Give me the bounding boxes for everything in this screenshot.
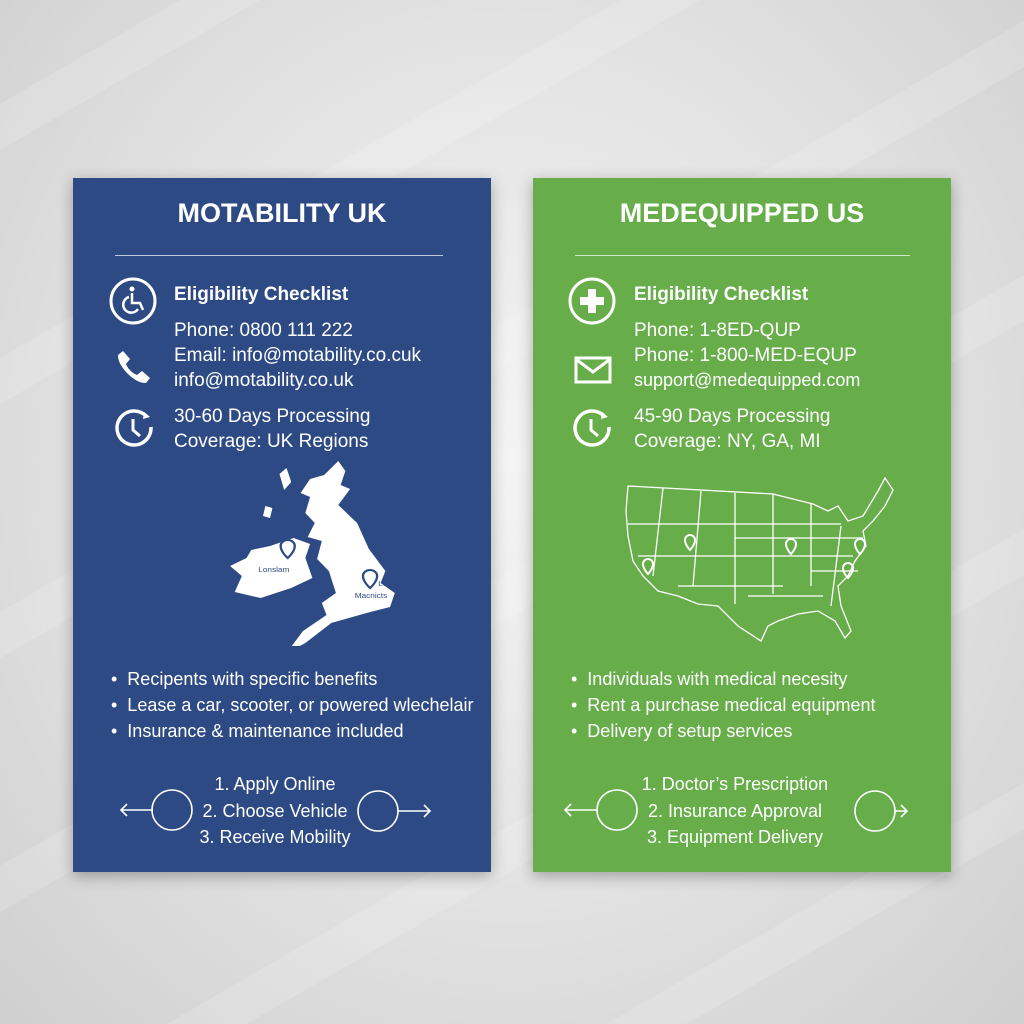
- title: MOTABILITY UK: [178, 198, 386, 228]
- arrows and circles: [120, 789, 431, 832]
- map: UK: Lossion: [378, 580, 407, 588]
- text: eligibility: Eligibility Checklist: [174, 284, 348, 305]
- bullets: [111, 669, 474, 741]
- text: contacts: Phone: 1-8ED-QUP: [634, 320, 801, 341]
- icon: phone: [118, 351, 150, 383]
- panel: MedEquipped US: [533, 178, 951, 872]
- icon: clock: [115, 409, 153, 447]
- icon: medical cross: [568, 278, 616, 324]
- text: processing: Coverage: UK Regions: [174, 431, 368, 452]
- text: contacts: info@motability.co.uk: [174, 370, 353, 391]
- panel: Motability UK: [73, 178, 491, 872]
- steps: 2. Insurance Approval: [648, 800, 822, 820]
- text: processing: Coverage: NY, GA, MI: [634, 431, 821, 452]
- bullets: • Insurance & maintenance included: [111, 721, 403, 741]
- text: contacts: support@medequipped.com: [634, 370, 860, 390]
- steps: 3. Equipment Delivery: [647, 827, 823, 847]
- text: processing: [174, 406, 370, 452]
- map: UK: Lonslam: [258, 566, 289, 574]
- steps: 1. Doctor’s Prescription: [642, 774, 828, 794]
- text: contacts: [634, 320, 860, 390]
- steps: 2. Choose Vehicle: [202, 800, 348, 820]
- icon: envelope: [574, 356, 612, 384]
- text: processing: 45-90 Days Processing: [634, 406, 830, 427]
- bullets: [571, 669, 876, 741]
- steps: [642, 774, 828, 847]
- text: contacts: Phone: 1-800-MED-EQUP: [634, 345, 857, 366]
- icon: wheelchair: [110, 278, 156, 324]
- title: MEDEQUIPPED US: [620, 198, 864, 228]
- steps: 3. Receive Mobility: [199, 827, 351, 847]
- icon: clock: [573, 409, 611, 447]
- bullets: • Individuals with medical necesity: [571, 669, 847, 689]
- bullets: • Delivery of setup services: [571, 721, 792, 741]
- bullets: • Recipents with specific benefits: [111, 669, 377, 689]
- map: UK: [230, 461, 407, 646]
- text: processing: [634, 406, 830, 452]
- bullets: • Lease a car, scooter, or powered wlechelair: [111, 695, 474, 715]
- text: eligibility: Eligibility Checklist: [634, 284, 808, 305]
- text: contacts: Email: info@motability.co.cuk: [174, 345, 421, 366]
- bullets: • Rent a purchase medical equipment: [571, 695, 875, 715]
- steps: [199, 774, 351, 847]
- map: USA: [625, 476, 894, 642]
- arrows and circles: [564, 789, 908, 832]
- map: UK: Macnicts: [355, 592, 387, 600]
- steps: 1. Apply Online: [214, 774, 336, 794]
- text: contacts: Phone: 0800 111 222: [174, 320, 353, 341]
- text: contacts: [174, 320, 421, 391]
- text: processing: 30-60 Days Processing: [174, 406, 370, 427]
